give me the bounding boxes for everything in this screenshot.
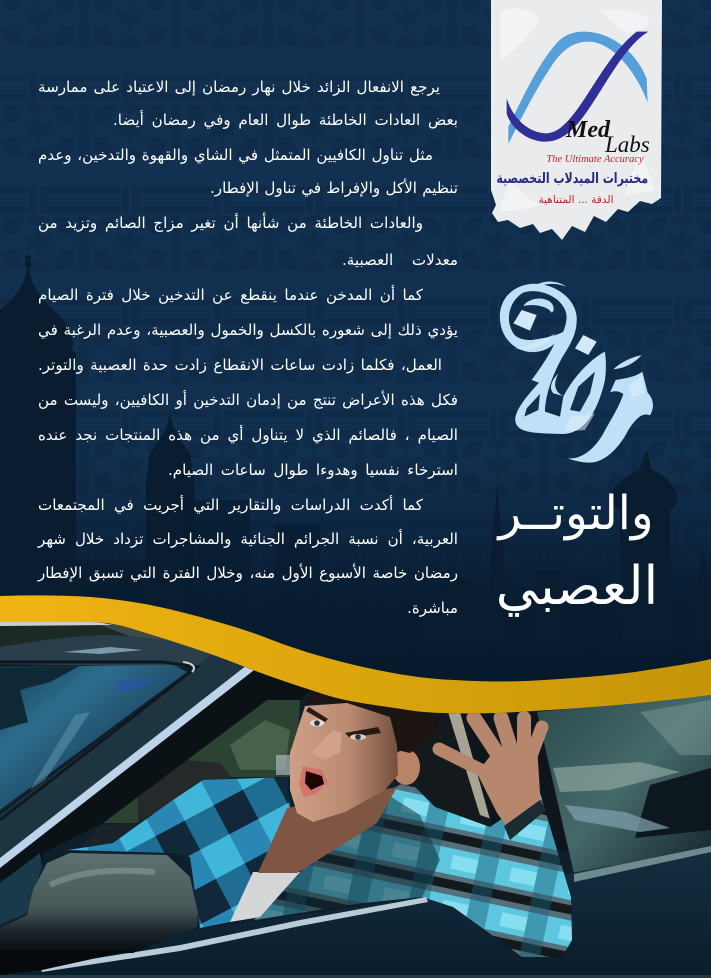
article body text xyxy=(37,78,458,617)
cuff xyxy=(504,800,546,840)
man xyxy=(68,688,572,957)
title: والتوتــر xyxy=(498,486,654,541)
logo banner xyxy=(491,0,662,240)
windshield rubber seal xyxy=(0,662,197,820)
shirt right xyxy=(254,780,572,957)
photo: man shouting from car xyxy=(0,620,711,978)
ramadan calligraphy emblem xyxy=(500,281,653,463)
car door body xyxy=(0,846,711,978)
side mirror xyxy=(0,853,198,975)
article body text: بعض العادات الخاطئة طوال العام وفي رمضان أيضا. xyxy=(113,111,458,129)
article body text: تنظيم الأكل والإفراط في تناول الإفطار. xyxy=(210,179,458,197)
title: العصبي xyxy=(496,556,658,617)
car interior behind man xyxy=(395,712,490,830)
logo text: tagline: The Ultimate Accuracy xyxy=(546,154,644,165)
door pillar xyxy=(448,712,494,820)
calligraphy tail xyxy=(568,372,653,463)
background: geometric pattern and mosque silhouette xyxy=(0,0,711,720)
article body text: استرخاء نفسيا وهدوءا طوال ساعات الصيام. xyxy=(168,461,458,479)
gold wave band xyxy=(0,595,711,713)
article body text: والعادات الخاطئة من شأنها أن تغير مزاج الصائم وتزيد من xyxy=(38,214,423,232)
article body text: كما أن المدخن عندما ينقطع عن التدخين خلال فترة الصيام xyxy=(38,286,423,304)
trees behind car xyxy=(0,622,240,662)
logo text: Med: Med xyxy=(566,117,610,143)
article body text: يؤدي ذلك إلى شعوره بالكسل والخمول والعصبية، وعدم الرغبة في xyxy=(38,321,458,339)
article body text: يرجع الانفعال الزائد خلال نهار رمضان إلى الاعتياد على ممارسة xyxy=(38,78,440,96)
chrome trim xyxy=(0,665,258,868)
title xyxy=(496,486,658,617)
shirt left xyxy=(68,777,290,928)
article body text: رمضان خاصة الأسبوع الأول منه، وخلال الفترة التي تسبق الإفطار xyxy=(38,564,458,582)
article body text: مثل تناول الكافيين المتمثل في الشاي والقهوة والتدخين، وعدم xyxy=(38,146,433,164)
article body text: معدلات العصبية. xyxy=(342,251,458,269)
brows and eyes xyxy=(306,707,381,740)
logo text: Arabic name: مختبرات الميدلاب التخصصية xyxy=(496,171,648,187)
article body text: فكل هذه الأعراض تنتج من إدمان التدخين أو الكافيين، وليست من xyxy=(38,391,458,409)
calligraphy body xyxy=(515,352,606,434)
hand xyxy=(439,718,542,827)
side window view xyxy=(80,700,300,847)
article body text: الصيام ، فالصائم الذي لا يتناول أي من هذه المنتجات نجد عنده xyxy=(38,426,458,444)
door trim chrome xyxy=(40,897,428,972)
calligraphy ring and stem xyxy=(500,284,577,385)
mouth xyxy=(299,766,328,797)
t-shirt xyxy=(230,872,300,922)
neck xyxy=(258,787,397,873)
shirt chest shadow xyxy=(254,793,440,920)
article body text: كما أكدت الدراسات والتقارير التي أجريت في المجتمعات xyxy=(38,496,423,514)
pillar between windshield and trim xyxy=(0,652,257,860)
logo text: Labs: Labs xyxy=(605,132,650,157)
logo ribbons xyxy=(507,32,648,144)
hair xyxy=(303,688,440,753)
windshield xyxy=(0,665,187,810)
article body text: مباشرة. xyxy=(407,599,458,617)
mosque silhouette xyxy=(0,255,708,576)
door frame black band xyxy=(0,667,320,880)
face xyxy=(290,703,398,822)
car roof xyxy=(0,635,257,667)
article body text: العمل، فكلما زادت ساعات الانقطاع زادت حدة العصبية والتوتر. xyxy=(38,356,442,374)
logo text: Arabic tagline: الدقة ... المتناهية xyxy=(538,194,614,206)
nose xyxy=(311,730,342,760)
rear window reflection xyxy=(537,695,711,878)
ear xyxy=(392,749,420,785)
article body text: العربية، أن نسبة الجرائم الجنائية والمشاجرات تزداد خلال شهر xyxy=(38,530,458,548)
